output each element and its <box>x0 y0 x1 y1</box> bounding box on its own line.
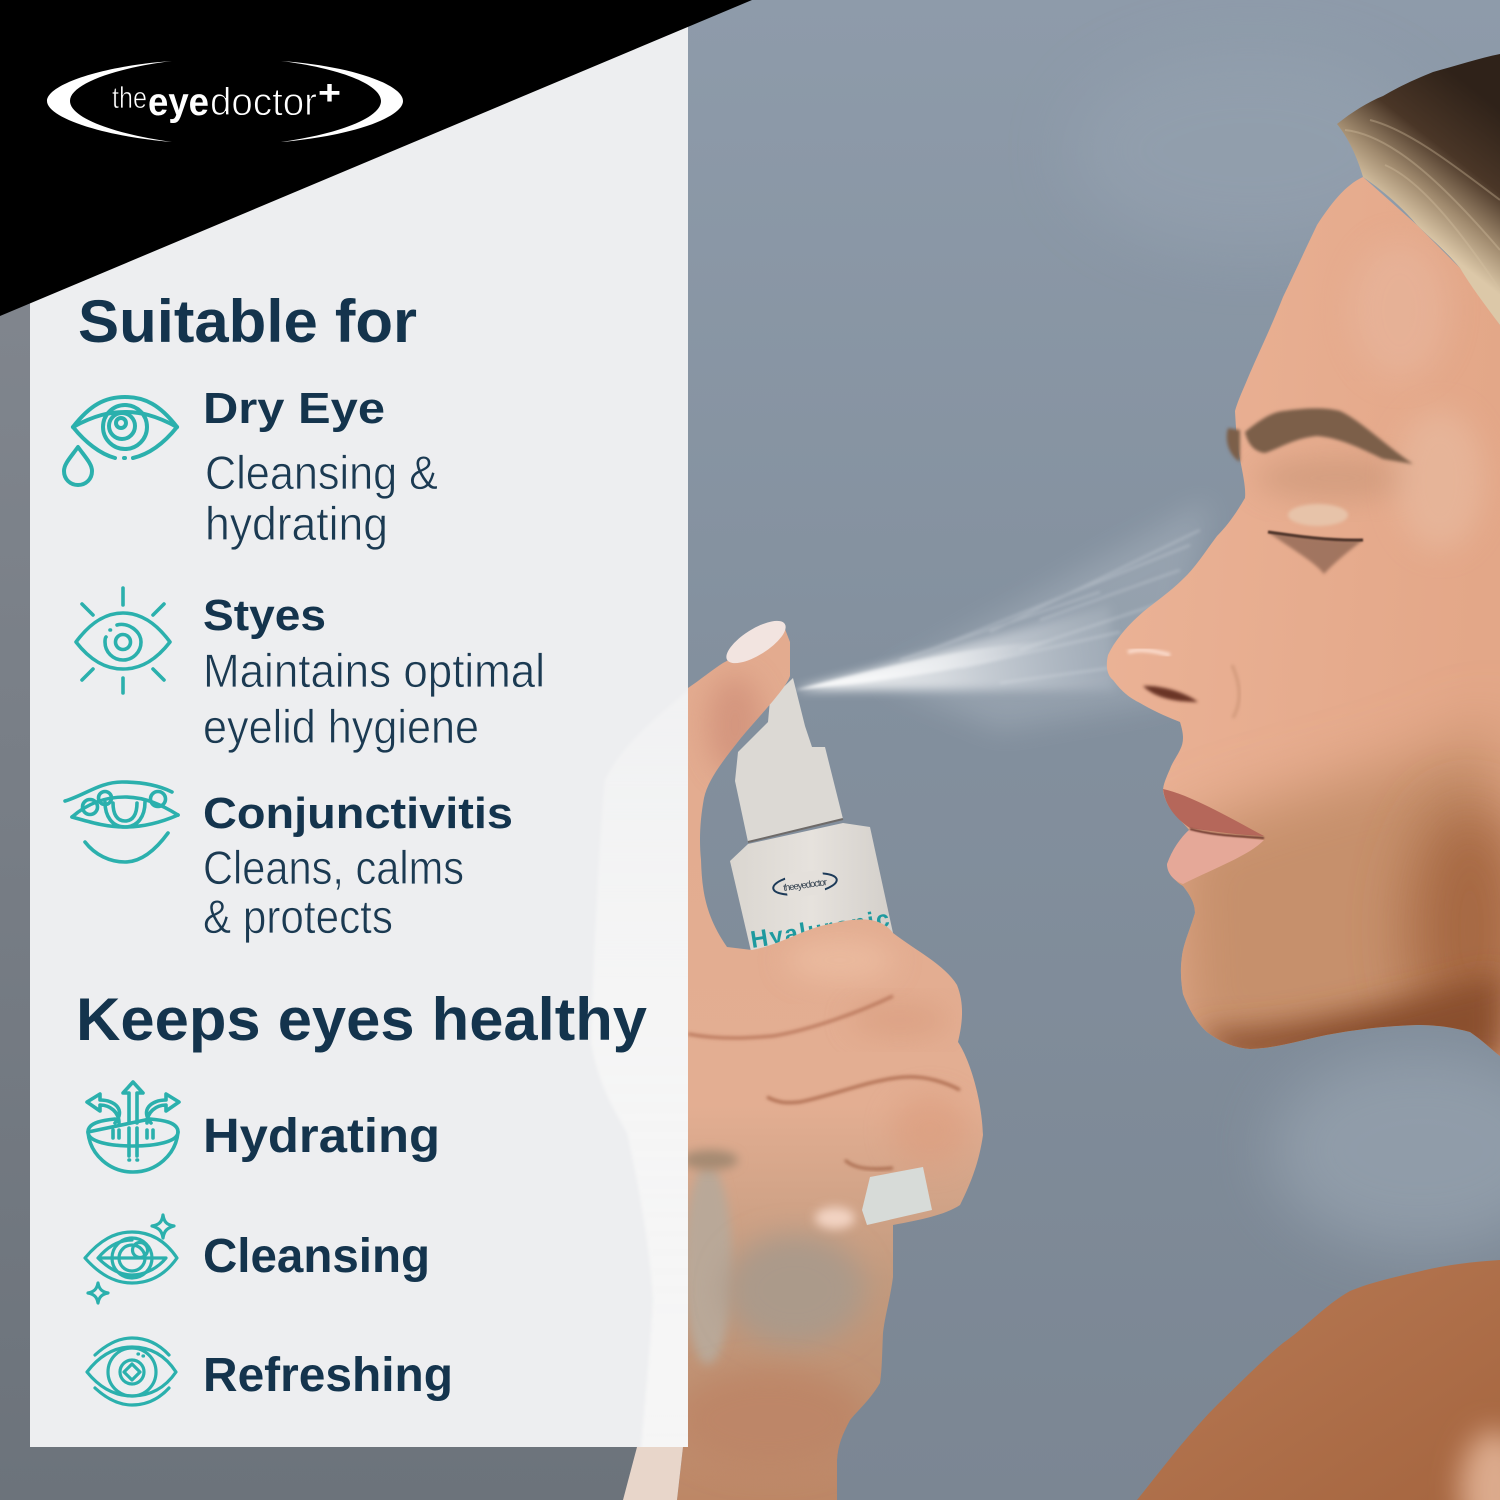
bottle logo: theeyedoctor <box>783 877 828 894</box>
styes text: Maintains optimal <box>203 644 545 697</box>
chest highlight <box>1460 1430 1500 1500</box>
text panel <box>30 0 700 1460</box>
cleansing label: Cleansing <box>203 1230 430 1283</box>
dry eye text: hydrating <box>205 497 388 550</box>
logo <box>47 61 403 142</box>
closed eyelid and lashes <box>1268 504 1363 574</box>
logo: doctor <box>210 81 317 124</box>
bottle label: Hyaluronic <box>749 905 891 954</box>
hand holding bottle <box>675 624 983 1500</box>
conjunctivitis text: Cleans, calms <box>203 841 464 894</box>
conjunctivitis text <box>203 789 513 943</box>
styes text: Styes <box>203 591 326 640</box>
heading: suitable for: Suitable for <box>78 288 417 355</box>
hydrating label: Hydrating <box>203 1110 440 1163</box>
icon: conjunctivitis <box>65 782 178 862</box>
dry eye text: Dry Eye <box>203 384 385 433</box>
conjunctivitis text: & protects <box>203 890 393 943</box>
bottle base <box>862 1167 932 1225</box>
woman's shoulder <box>1137 1260 1500 1500</box>
spray mist <box>795 500 1210 730</box>
eyebrow <box>1227 408 1413 464</box>
dry eye text <box>203 384 438 550</box>
bottle nozzle and collar <box>735 678 843 842</box>
wrist under panel <box>623 1447 683 1500</box>
conjunctivitis text: Conjunctivitis <box>203 789 513 838</box>
hair <box>1337 54 1500 325</box>
logo: + <box>318 74 341 112</box>
nose detail <box>1128 650 1239 718</box>
lips <box>1163 789 1264 884</box>
black corner banner <box>0 0 752 316</box>
spray bottle <box>730 678 893 990</box>
refreshing label: Refreshing <box>203 1349 453 1402</box>
styes text: eyelid hygiene <box>203 700 479 753</box>
styes text <box>203 591 545 753</box>
icon: styes <box>76 588 170 693</box>
bottle logo <box>772 868 838 900</box>
heading: keeps eyes healthy: Keeps eyes healthy <box>76 986 648 1053</box>
icon: refreshing <box>87 1338 176 1405</box>
dry eye text: Cleansing & <box>205 446 438 499</box>
woman's face in profile <box>1107 177 1500 1060</box>
bottle body <box>730 823 893 990</box>
logo: eye <box>148 81 209 124</box>
icon: cleansing <box>85 1215 177 1303</box>
logo: the <box>112 80 147 115</box>
fingernail <box>720 613 792 671</box>
icon: hydrating <box>87 1082 179 1172</box>
icon: dry eye <box>64 397 177 485</box>
